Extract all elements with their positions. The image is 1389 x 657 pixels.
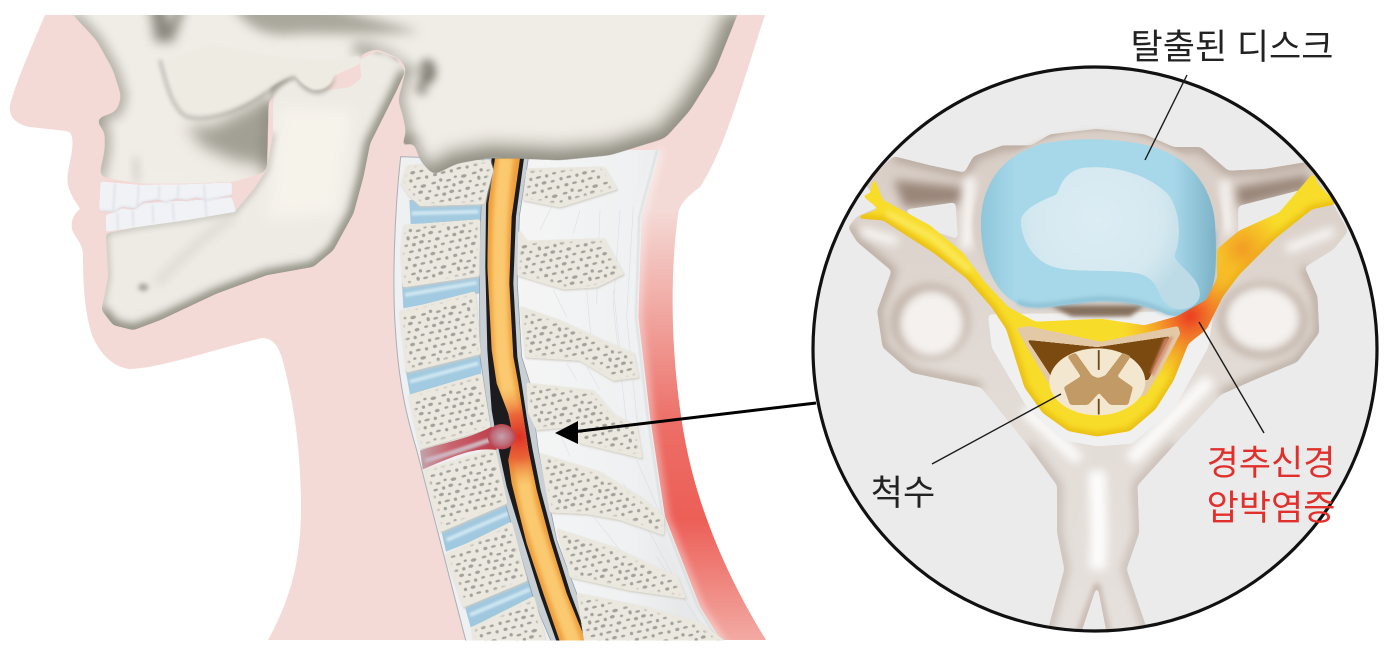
neck back inflammation band [638, 205, 766, 640]
illustration: side view of head and neck [0, 0, 767, 657]
herniated disc outer annulus [981, 139, 1216, 316]
disc highlights [405, 212, 530, 615]
upper teeth [99, 182, 232, 212]
vertebral bodies and spinous processes [399, 160, 747, 657]
spinal cord cross-section [1049, 348, 1145, 415]
gray matter butterfly [1064, 353, 1133, 405]
herniated disc pressing on the cord [420, 424, 516, 469]
head and neck skin silhouette [10, 15, 766, 640]
cheekbone and zygomatic arch over the jaw [157, 56, 361, 122]
label: cervical nerve compression inflammation: 압박염증 [1207, 489, 1335, 528]
vertebra bone [849, 129, 1348, 630]
spinal canal and dura [479, 158, 581, 640]
cervical nerve [860, 175, 1334, 436]
leader line: nerve compression [1199, 322, 1264, 433]
intervertebral discs [402, 200, 534, 627]
mandible [102, 52, 404, 330]
bone highlights [861, 176, 1334, 569]
label: herniated disc: 탈출된 디스크 [1131, 28, 1333, 67]
teeth [99, 182, 236, 232]
anterior longitudinal ligament [393, 156, 546, 640]
eye socket shadows [144, 15, 190, 49]
skull upper part and cranium [73, 15, 738, 184]
spinal cord [469, 157, 575, 647]
posterior ligament region [480, 150, 725, 647]
left articular facet [891, 284, 969, 360]
leader line: herniated disc [1145, 75, 1187, 160]
black cerebrospinal space [485, 158, 591, 647]
side foramina [907, 190, 1298, 238]
leader line: spinal cord [932, 394, 1061, 464]
nasal root ridge [135, 157, 137, 180]
maxilla shadow [187, 97, 272, 167]
magnified circle panel: cervical vertebra cross-section [813, 67, 1377, 657]
ear canal [419, 60, 435, 84]
spinal canal opening [988, 311, 1214, 446]
vertebral body rim [973, 131, 1222, 317]
spine lateral view [394, 150, 747, 657]
skull edge shading [73, 15, 737, 177]
lower teeth [106, 197, 236, 232]
dural sac interior [1017, 326, 1180, 396]
label: spinal cord: 척수 [871, 474, 935, 513]
right articular facet [1218, 282, 1307, 358]
label: cervical nerve compression inflammation: 경추신경 [1207, 444, 1335, 483]
cranium lower shading [433, 15, 737, 175]
arrow pointing to compression site [555, 403, 816, 444]
disc inner nucleus with protrusion [1021, 167, 1200, 309]
